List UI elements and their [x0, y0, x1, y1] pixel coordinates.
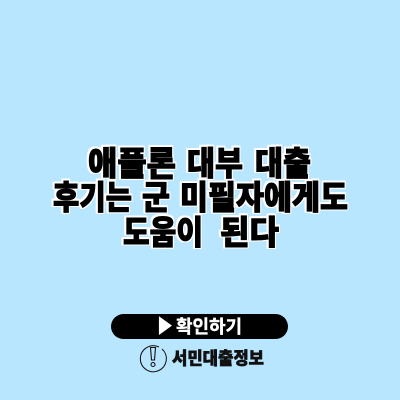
title: 후기는 [53, 179, 132, 216]
button: confirm [111, 314, 288, 339]
title: 도움이 [123, 214, 203, 251]
brand logo [140, 346, 264, 372]
title: 군 [142, 179, 170, 216]
title: 대부 [187, 145, 243, 182]
button: confirm: 확인하기 [176, 317, 242, 337]
icon: exclamation circle [140, 346, 166, 372]
title: 미필자에게도 [180, 179, 348, 216]
title [53, 145, 348, 251]
button: confirm: ▶ [157, 316, 173, 338]
title: 된다 [220, 214, 279, 251]
title: 애플론 [88, 145, 176, 182]
title: 대출 [255, 145, 311, 182]
brand name: 서민대출정보 [172, 348, 264, 368]
